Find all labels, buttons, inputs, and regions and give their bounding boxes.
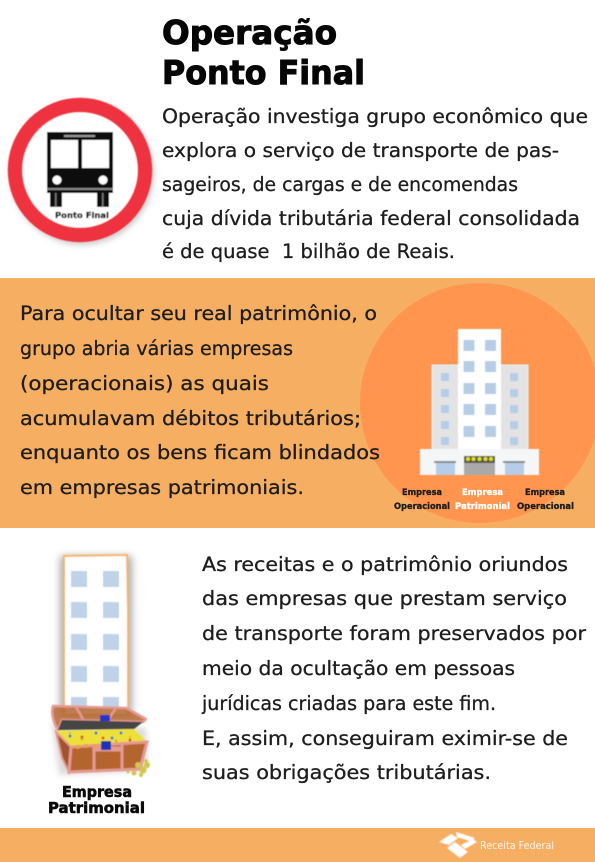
text block: concealment (20, 302, 380, 499)
treasure chest (52, 706, 150, 777)
title (162, 13, 365, 92)
icon: Receita Federal logo (439, 832, 477, 858)
text block: conclusion: jurídicas criadas para este fim. (201, 692, 496, 715)
label: empresa patrimonial (48, 783, 145, 817)
text block: conclusion: de transporte foram preservados por (202, 622, 587, 645)
label: empresa operacional left: Empresa (402, 488, 442, 498)
title: Operação (162, 13, 337, 52)
label: empresa patrimonial: Empresa (62, 783, 132, 801)
text block: intro: explora o serviço de transporte de pas- (162, 139, 559, 162)
text block: intro: Operação investiga grupo econômico que (162, 105, 588, 128)
panel: hidden assets (0, 278, 595, 528)
text block: intro (162, 105, 588, 263)
text block: concealment: enquanto os bens ficam blindados (20, 441, 380, 464)
text block: conclusion: E, assim, conseguiram eximir-se de (202, 727, 568, 750)
text block: conclusion: suas obrigações tributárias. (202, 761, 491, 784)
text block: concealment: (operacionais) as quais (20, 372, 269, 395)
footer band (0, 828, 595, 862)
text block: conclusion: As receitas e o patrimônio oriundos (202, 553, 568, 576)
text block: concealment: acumulavam débitos tributários; (20, 407, 361, 430)
icon: bus stop sign (10, 101, 154, 245)
label: empresa operacional left (394, 488, 450, 512)
text block: concealment: grupo abria várias empresas (20, 337, 293, 360)
label: empresa operacional right: Empresa (525, 488, 565, 498)
text block: conclusion: das empresas que prestam serviço (202, 587, 567, 610)
label: empresa patrimonial (455, 488, 510, 512)
logo wordmark: Receita Federal (480, 839, 554, 852)
text block: concealment: em empresas patrimoniais. (20, 476, 304, 499)
text block: conclusion: meio da ocultação em pessoas (202, 657, 515, 680)
text block: intro: sageiros, de cargas e de encomendas (162, 173, 518, 196)
text block: intro: cuja dívida tributária federal consolidada (162, 207, 580, 230)
text block: intro: é de quase 1 bilhão de Reais. (162, 240, 455, 263)
label: empresa patrimonial: Patrimonial (455, 502, 510, 512)
icon: bus stop sign: Ponto Final (55, 211, 109, 220)
text block: conclusion (201, 553, 587, 784)
icon: tower with treasure chest (48, 555, 150, 817)
label: empresa patrimonial: Patrimonial (48, 799, 145, 817)
label: empresa patrimonial: Empresa (462, 488, 503, 498)
label: empresa operacional right: Operacional (517, 502, 574, 512)
label: empresa operacional right (517, 488, 574, 512)
title: Ponto Final (162, 53, 365, 92)
label: empresa operacional left: Operacional (394, 502, 450, 512)
text block: concealment: Para ocultar seu real patrimônio, o (20, 302, 377, 325)
icon: orange circle with building (360, 283, 595, 523)
